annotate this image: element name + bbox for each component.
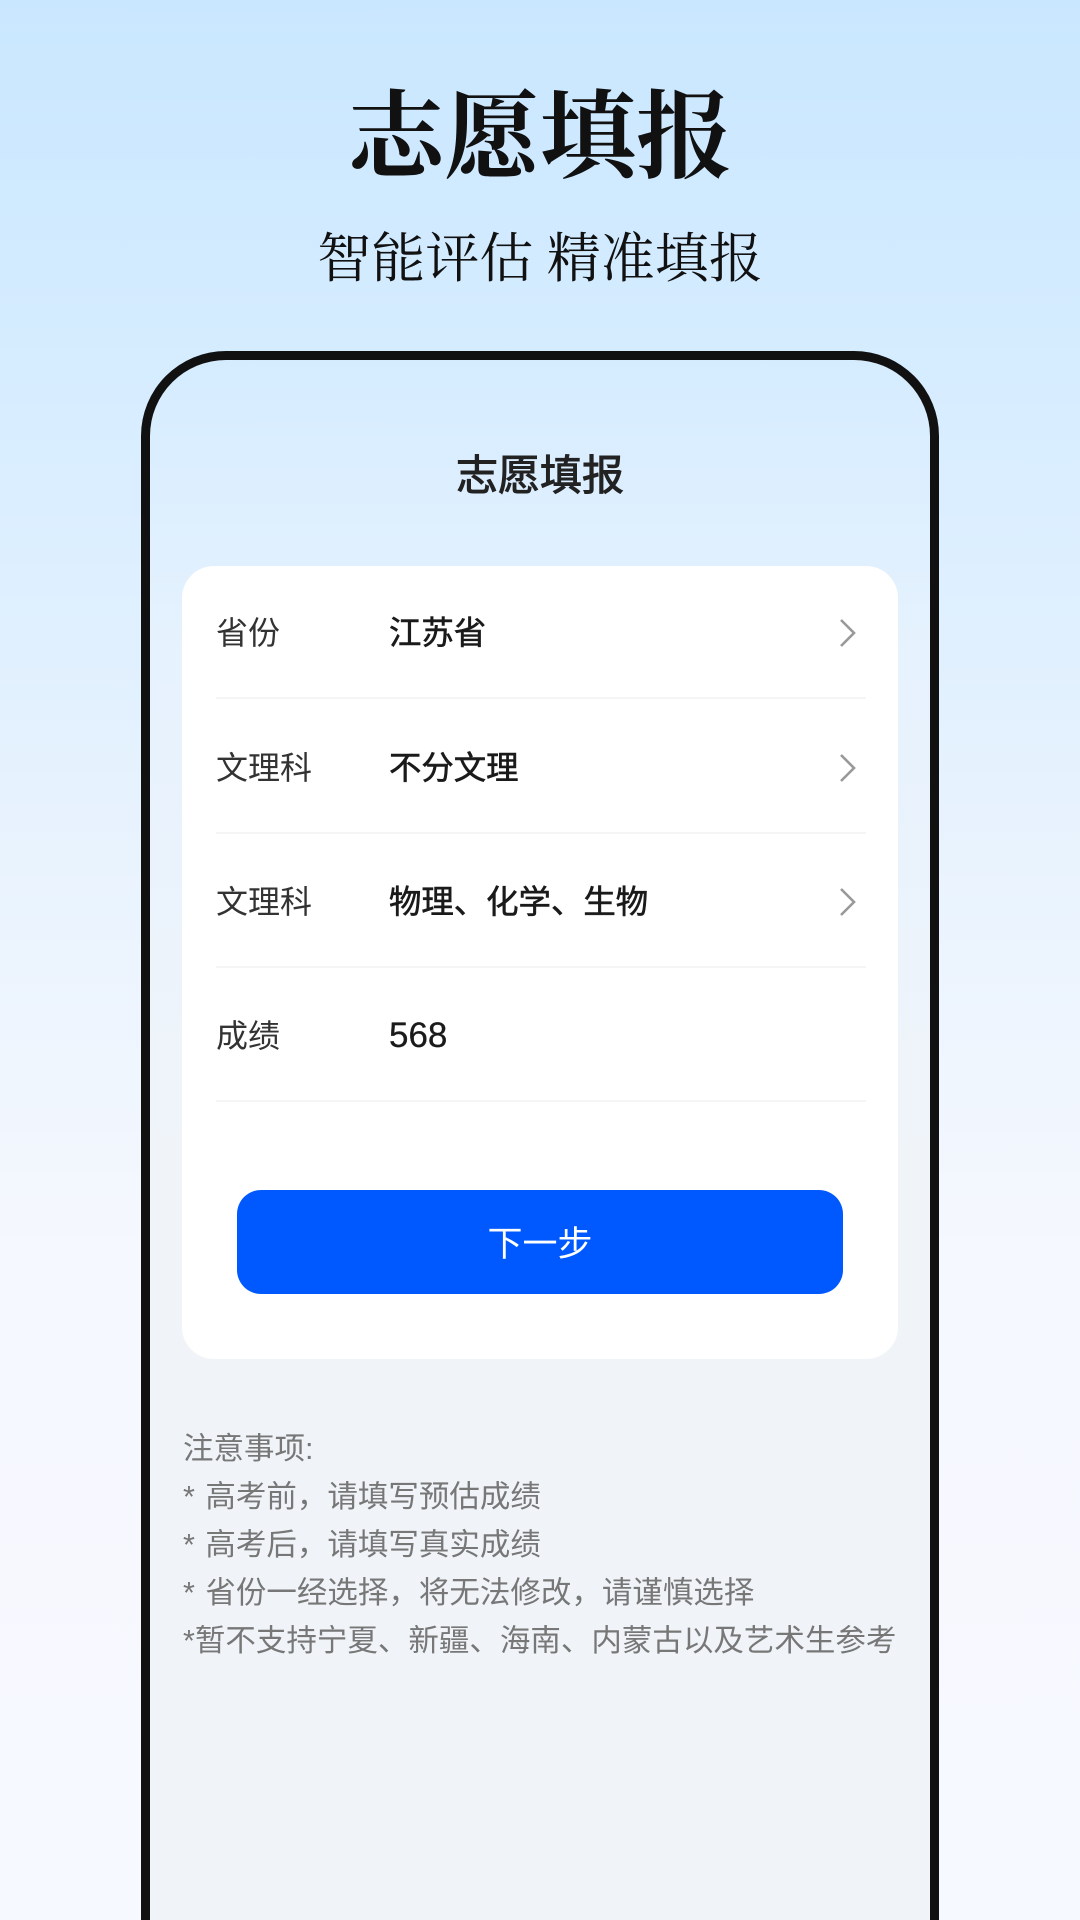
notes text block: * 高考后，请填写真实成绩 [183,1528,541,1562]
row: score label: 成绩 [216,1018,280,1054]
notes text block: 注意事项: [183,1432,313,1466]
row: province label: 省份 [216,615,280,651]
notes text block [183,1432,896,1658]
phone frame [141,351,939,1920]
row: subjects label: 文理科 [216,884,312,920]
panel: form card [182,566,898,1359]
row: province value: 江苏省 [389,615,486,651]
row: score value: 568 [389,1016,447,1055]
notes text block: *暂不支持宁夏、新疆、海南、内蒙古以及艺术生参考 [183,1624,896,1658]
row: subjects value: 物理、化学、生物 [389,884,648,920]
subtitle: 智能评估 精准填报 [317,229,763,289]
notes text block: * 省份一经选择，将无法修改，请谨慎选择 [183,1576,754,1610]
notes text block: * 高考前，请填写预估成绩 [183,1480,541,1514]
button: next step: 下一步 [487,1225,592,1264]
title: 志愿填报 [348,84,732,191]
row: subject type value: 不分文理 [389,750,519,786]
phone screen title: 志愿填报 [456,452,624,499]
button: next step [237,1190,843,1294]
icon: chevron subject type [840,754,856,782]
icon: chevron subjects [840,888,856,916]
icon: chevron province [840,619,856,647]
row: subject type label: 文理科 [216,750,312,786]
